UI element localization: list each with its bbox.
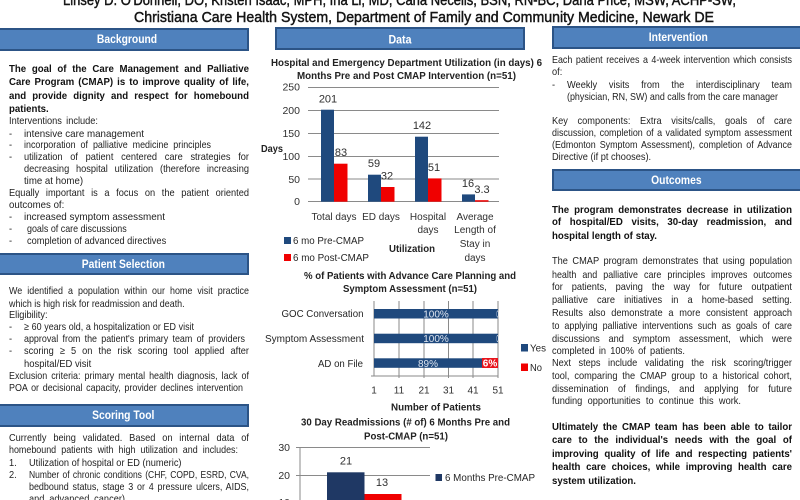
text block: outcomes discussion: completed in 100% of patients. xyxy=(552,344,685,356)
bar chart: hospital and emergency department utilization: Hospital xyxy=(410,212,446,223)
bar chart: advance care planning and symptom assessment: 0 xyxy=(496,310,499,320)
bar chart: advance care planning and symptom assessment: % of Patients with Advance Care Planning and xyxy=(304,270,516,282)
bar chart: advance care planning and symptom assessment: Symptom Assessment (n=51) xyxy=(343,283,477,295)
text block: interventions list: - xyxy=(9,151,12,163)
panel: outcomes xyxy=(552,169,800,486)
panel: background xyxy=(0,28,249,247)
text block: background goal: The goal of the Care Management and Palliative xyxy=(9,62,249,74)
text block: interventions list: - xyxy=(9,139,12,151)
bar chart: advance care planning and symptom assessment: 21 xyxy=(418,386,430,396)
text block: outcomes discussion: discussions and symptom assessment, which were xyxy=(552,332,792,344)
bar chart: 30 day readmissions: Post-CMAP (n=51) xyxy=(364,430,448,442)
text block: patient selection criteria: - xyxy=(9,321,12,333)
text block: intervention description: (physician, RN, SW) and calls from the care manager xyxy=(567,91,778,103)
heading: background xyxy=(0,28,249,51)
panel: patient selection xyxy=(0,253,249,394)
text block: interventions list: - xyxy=(9,235,12,247)
text block: outcomes discussion: for patients, paving the way for future outpatient xyxy=(552,281,792,293)
text block: intervention description: discussion, completion of a validated symptom assessment xyxy=(552,126,792,138)
text block: background goal xyxy=(9,62,249,114)
text block: scoring tool description: Number of chronic conditions (CHF, COPD, ESRD, CVA, xyxy=(29,468,249,480)
text block: patient selection criteria: We identified a population within our home visit practice xyxy=(9,285,249,297)
bar chart: 30 day readmissions: 30 xyxy=(278,442,290,454)
panel: data xyxy=(261,27,546,500)
bars: post-CMAP xyxy=(334,164,488,202)
text block: interventions list: incorporation of palliative medicine principles xyxy=(24,139,211,151)
text block: outcomes discussion: Results also demonstrate a more consistent approach xyxy=(552,306,792,318)
heading: background: Background xyxy=(97,32,157,46)
text block: outcomes conclusion: care to the individual's needs with the goal of xyxy=(552,434,792,446)
text block: outcomes conclusion: Ultimately the CMAP team has been able to tailor xyxy=(552,420,792,432)
bar chart: hospital and emergency department utilization: Stay in xyxy=(460,239,490,250)
bar chart: 30 day readmissions: 6 Months Pre-CMAP xyxy=(445,472,535,484)
text block: intervention description: of: xyxy=(552,66,562,78)
bar chart: hospital and emergency department utilization: 201 xyxy=(319,94,337,106)
text block: interventions list: completion of advanced directives xyxy=(27,235,166,247)
bar chart: hospital and emergency department utilization: 142 xyxy=(413,120,431,132)
authors and affiliation xyxy=(63,0,736,26)
bar chart: hospital and emergency department utilization: 6 mo Post-CMAP xyxy=(293,252,369,264)
bar chart: advance care planning and symptom assessment: Yes xyxy=(530,342,546,354)
bar chart: advance care planning and symptom assessment: Number of Patients xyxy=(391,402,481,414)
bar chart: advance care planning and symptom assessment: 41 xyxy=(467,386,479,396)
text block: scoring tool description: Currently being validated. Based on internal data of xyxy=(9,432,249,444)
heading: data: Data xyxy=(388,32,412,46)
bar chart: hospital and emergency department utilization: Months Pre and Post CMAP Intervention (n=51) xyxy=(297,70,516,82)
heading: scoring tool: Scoring Tool xyxy=(92,408,155,422)
bar chart: hospital and emergency department utilization: 250 xyxy=(282,82,300,94)
text block: patient selection criteria: ≥ 60 years old, a hospitalization or ED visit xyxy=(24,321,194,333)
text block: interventions list: goals of care discussions xyxy=(27,223,127,235)
text block: scoring tool description: Utilization of hospital or ED (numeric) xyxy=(29,456,182,468)
text block: intervention description: Directive (if pt chooses). xyxy=(552,151,651,163)
text block: interventions list: decreasing hospital utilization (therefore increasing xyxy=(24,163,249,175)
text block: outcomes summary: hospital length of stay. xyxy=(552,230,657,242)
panel: intervention xyxy=(552,26,800,163)
text block: patient selection criteria: - xyxy=(9,333,12,345)
bar chart: hospital and emergency department utilization: days xyxy=(417,225,439,236)
heading: patient selection: Patient Selection xyxy=(82,257,165,271)
bar chart: advance care planning and symptom assessment: 6% xyxy=(483,358,497,370)
bar chart: hospital and emergency department utilization: Utilization xyxy=(389,243,435,255)
bar chart: hospital and emergency department utilization: 150 xyxy=(282,128,300,140)
text block: outcomes discussion: health and palliative care principles improves outcomes xyxy=(552,268,792,280)
text block: patient selection criteria: scoring ≥ 5 on the risk scoring tool applied after xyxy=(24,345,249,357)
text block: outcomes summary xyxy=(552,204,792,242)
bar chart: hospital and emergency department utilization: 0 xyxy=(294,196,300,208)
bar chart: advance care planning and symptom assessment: 100% xyxy=(423,310,449,320)
text block: intervention description: (Edmonton Symptom Assessment), completion of Advance xyxy=(552,138,792,150)
bar chart: hospital and emergency department utilization: 32 xyxy=(381,170,393,182)
bar chart: hospital and emergency department utilization: 83 xyxy=(335,147,347,159)
bar chart: 30 day readmissions: 20 xyxy=(278,470,290,482)
bar chart: hospital and emergency department utilization: 100 xyxy=(282,151,300,163)
text block: outcomes summary: The program demonstrates decrease in utilization xyxy=(552,204,792,216)
bar chart: hospital and emergency department utilization: 16 xyxy=(462,178,474,190)
text block: interventions list: outcomes of: xyxy=(9,199,64,211)
bar chart: hospital and emergency department utilization: 3.3 xyxy=(474,184,490,196)
text block: scoring tool description: homebound patients with high utilization and includes: xyxy=(9,444,238,456)
bar chart: hospital and emergency department utilization: 200 xyxy=(282,105,300,117)
text block: outcomes discussion: funding opportunities to continue this work. xyxy=(552,395,741,407)
text block: outcomes discussion: The CMAP program demonstrates that using population xyxy=(552,255,792,267)
text block: interventions list: utilization of patient centered care strategies for xyxy=(24,151,249,163)
text block: intervention description: - xyxy=(552,79,555,91)
text block: interventions list: increased symptom assessment xyxy=(24,211,165,223)
text block: patient selection criteria: POA or decisional capacity, provider declines intervention xyxy=(9,382,243,394)
text block: scoring tool description: bedbound status, stage 3 or 4 pressure ulcers, AIDS, xyxy=(29,480,249,492)
text block: interventions list: time at home) xyxy=(24,175,83,187)
heading: intervention: Intervention xyxy=(648,30,708,44)
text block: outcomes discussion xyxy=(552,255,792,407)
text block: intervention description xyxy=(552,54,792,163)
bar chart: 30 day readmissions: 13 xyxy=(376,477,388,489)
bar chart: advance care planning and symptom assessment: 31 xyxy=(443,386,454,396)
bar chart: advance care planning and symptom assessment: 1 xyxy=(371,386,377,396)
heading: outcomes: Outcomes xyxy=(651,173,701,187)
text block: outcomes discussion: palliative care initiatives in a home-based setting. xyxy=(552,294,792,306)
text block: interventions list: Interventions include: xyxy=(9,115,98,127)
bar chart: hospital and emergency department utilization: Total days xyxy=(311,212,357,223)
text block: outcomes conclusion: improving quality of life and respecting patients' xyxy=(552,448,792,460)
text block: patient selection criteria: approval from the patient's primary team of providers xyxy=(24,333,245,345)
bar chart: hospital and emergency department utilization: 6 mo Pre-CMAP xyxy=(293,235,364,247)
text block: scoring tool description: 1. xyxy=(9,456,17,468)
heading: data xyxy=(276,28,524,49)
authors and affiliation: Christiana Care Health System, Department of Family and Community Medicine, Newark DE xyxy=(134,9,714,26)
heading: patient selection xyxy=(0,253,249,275)
text block: outcomes discussion: Next steps include validating the risk scoring/trigger xyxy=(552,357,792,369)
bar chart: advance care planning and symptom assessment xyxy=(265,270,546,414)
text block: patient selection criteria: hospital/ED visit xyxy=(24,358,91,370)
text block: patient selection criteria: - xyxy=(9,345,12,357)
text block: interventions list: - xyxy=(9,211,12,223)
bar chart: hospital and emergency department utilization: Length of xyxy=(454,225,496,236)
text block: intervention description: Key components: Extra visits/calls, goals of care xyxy=(552,114,792,126)
bar chart: advance care planning and symptom assessment: No xyxy=(530,362,542,374)
bar chart: advance care planning and symptom assessment: AD on File xyxy=(318,358,363,370)
bar chart: advance care planning and symptom assessment: GOC Conversation xyxy=(282,308,364,320)
bar chart: 30 day readmissions: 21 xyxy=(340,456,352,468)
text block: outcomes conclusion: system utilization. xyxy=(552,474,636,486)
text block: outcomes summary: of hospital/ED visits, 30-day readmission, and xyxy=(552,216,792,228)
heading: scoring tool xyxy=(0,404,249,427)
heading: outcomes xyxy=(552,169,800,191)
text block: scoring tool description: 2. xyxy=(9,468,17,480)
text block: patient selection criteria: which is high risk for readmission and death. xyxy=(9,298,185,310)
bar chart: hospital and emergency department utilization: Average xyxy=(456,212,494,223)
text block: outcomes conclusion xyxy=(552,420,792,486)
text block: patient selection criteria xyxy=(9,285,249,394)
bar chart: hospital and emergency department utilization: Days xyxy=(261,143,283,155)
bar chart: 30 day readmissions: 30 Day Readmissions (# of) 6 Months Pre and xyxy=(301,416,510,428)
text block: scoring tool description xyxy=(9,432,249,500)
bar chart: hospital and emergency department utilization: 51 xyxy=(428,162,440,174)
text block: interventions list xyxy=(9,115,249,247)
text block: interventions list: - xyxy=(9,128,12,140)
bars: pre-CMAP xyxy=(321,110,475,202)
text block: patient selection criteria: Exclusion criteria: primary mental health diagnosis, lack of xyxy=(9,370,249,382)
text block: interventions list: Equally important is a focus on the patient oriented xyxy=(9,187,249,199)
text block: outcomes discussion: to applying palliative interventions such as goals of care xyxy=(552,320,792,332)
bar chart: hospital and emergency department utilization xyxy=(261,57,542,264)
text block: interventions list: - xyxy=(9,223,12,235)
text block: background goal: Care Program (CMAP) is to improve quality of life, xyxy=(9,76,249,88)
bar chart: advance care planning and symptom assessment: 100% xyxy=(423,334,449,345)
text block: interventions list: intensive care management xyxy=(24,128,144,140)
text block: outcomes conclusion: health care choices, while improving health care xyxy=(552,461,792,473)
bar chart: hospital and emergency department utilization: 59 xyxy=(368,158,380,170)
text block: patient selection criteria: Eligibility: xyxy=(9,309,48,321)
bar chart: advance care planning and symptom assessment: 89% xyxy=(418,359,438,370)
bar chart: advance care planning and symptom assessment: 11 xyxy=(394,386,405,396)
panel: scoring tool xyxy=(0,404,249,500)
text block: background goal: and provide dignity and respect for homebound xyxy=(9,90,249,102)
bar chart: hospital and emergency department utilization: 50 xyxy=(288,174,300,186)
heading: intervention xyxy=(552,26,800,49)
bar chart: advance care planning and symptom assessment: 0 xyxy=(496,334,499,345)
bar chart: advance care planning and symptom assessment: Symptom Assessment xyxy=(265,333,364,345)
bar chart: hospital and emergency department utilization: ED days xyxy=(362,212,400,223)
bar chart: 30 day readmissions xyxy=(278,416,535,500)
text block: intervention description: Each patient receives a 4-week intervention which consists xyxy=(552,54,792,66)
text block: background goal: patients. xyxy=(9,102,49,114)
bar chart: hospital and emergency department utilization: days xyxy=(464,253,486,264)
text block: intervention description: Weekly visits from the interdisciplinary team xyxy=(567,79,792,91)
bar chart: advance care planning and symptom assessment: 51 xyxy=(492,386,504,396)
text block: outcomes discussion: tool, comparing the CMAP group to a historical cohort, xyxy=(552,370,792,382)
text block: outcomes discussion: dissemination of findings, and applying for future xyxy=(552,382,792,394)
